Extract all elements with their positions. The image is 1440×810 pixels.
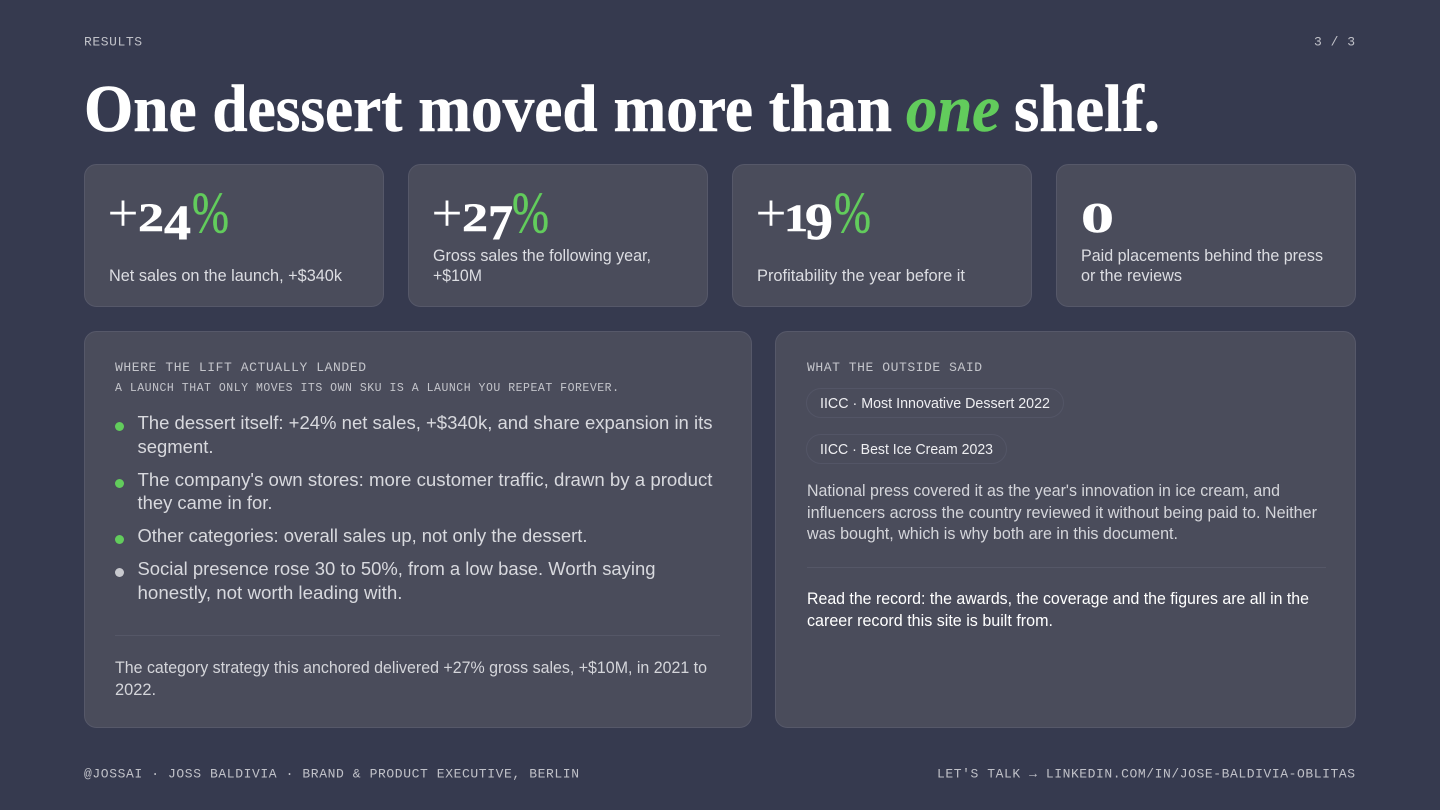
bullet: stores: The company's own stores: more customer traffic, drawn by a product [138, 469, 713, 490]
bullet: social: Social presence rose 30 to 50%, from a low base. Worth saying [138, 558, 656, 579]
stat label [1081, 246, 1323, 285]
stat value [108, 180, 229, 250]
panel note: 2022. [115, 680, 156, 699]
stat value: % [192, 180, 229, 245]
stat label: Net sales on the launch, +$340k [109, 266, 343, 285]
stat card: +27% [408, 164, 708, 306]
stat card: +19% [732, 164, 1032, 306]
bullet: stores: they came in for. [138, 492, 272, 513]
panel heading: WHAT THE OUTSIDE SAID [807, 360, 982, 375]
footer: contact: LET'S TALK → LINKEDIN.COM/IN/JOSE-BALDIVIA-OBLITAS [937, 766, 1355, 782]
stat value [756, 180, 871, 251]
stat label: Profitability the year before it [757, 266, 965, 285]
stat value: % [512, 180, 549, 245]
press paragraph: influencers across the country reviewed it without being paid to. Neither [807, 503, 1317, 522]
stat label [433, 246, 651, 285]
panel subheading: A LAUNCH THAT ONLY MOVES ITS OWN SKU IS A LAUNCH YOU REPEAT FOREVER. [115, 382, 619, 395]
stat label: Paid placements behind the press [1081, 246, 1323, 265]
stat value [432, 180, 549, 250]
award pill 2023 [806, 434, 1006, 464]
stat value: + [756, 183, 786, 243]
press paragraph [806, 481, 1317, 543]
panel: where the lift landed [84, 332, 752, 728]
stat card: 0 [1056, 164, 1356, 306]
stat value: 0 [1081, 196, 1114, 242]
panel: what the outside said [776, 332, 1356, 728]
panel note: The category strategy this anchored delivered +27% gross sales, +$10M, in 2021 to [115, 658, 707, 677]
press paragraph: National press covered it as the year's innovation in ice cream, and [807, 481, 1280, 500]
stat value: 9 [805, 194, 833, 251]
stat value: 7 [488, 194, 513, 250]
bullet: social: honestly, not worth leading with. [138, 582, 402, 603]
stat label: or the reviews [1081, 266, 1182, 285]
title: shelf. [1014, 72, 1160, 146]
stat value: 2 [462, 195, 488, 240]
stat label: Gross sales the following year, [433, 246, 651, 265]
bullet: dessert [115, 412, 712, 457]
stat value: 4 [164, 194, 191, 250]
title: one [906, 72, 1000, 146]
stat value: + [432, 183, 462, 243]
stat value: % [834, 180, 871, 245]
stat label: +$10M [433, 266, 482, 285]
panel heading: WHERE THE LIFT ACTUALLY LANDED [115, 360, 366, 375]
title: One dessert moved more than [84, 72, 892, 146]
bullet: social [115, 558, 656, 603]
panel note [115, 658, 707, 699]
bullet: categories: Other categories: overall sales up, not only the dessert. [138, 525, 588, 546]
stat value: 2 [138, 195, 164, 240]
bullet: stores [115, 469, 713, 513]
press paragraph: was bought, which is why both are in this document. [806, 524, 1178, 543]
page number: 3 / 3 [1314, 34, 1355, 50]
stat value: + [108, 183, 138, 243]
footer: byline: @JOSSAI · JOSS BALDIVIA · BRAND & PRODUCT EXECUTIVE, BERLIN [84, 766, 579, 782]
stat card: +24% [84, 164, 384, 306]
closing note: career record this site is built from. [807, 611, 1053, 630]
award pill 2023: IICC · Best Ice Cream 2023 [820, 442, 993, 458]
eyebrow: results: RESULTS [84, 34, 142, 50]
closing note [807, 589, 1309, 630]
bullet: dessert: segment. [138, 436, 214, 457]
bullet: dessert: The dessert itself: +24% net sales, +$340k, and share expansion in its [138, 412, 712, 433]
award pill 2022: IICC · Most Innovative Dessert 2022 [820, 396, 1050, 412]
stat value: 1 [784, 197, 808, 240]
closing note: Read the record: the awards, the coverage and the figures are all in the [807, 589, 1309, 608]
award pill 2022 [806, 388, 1064, 418]
